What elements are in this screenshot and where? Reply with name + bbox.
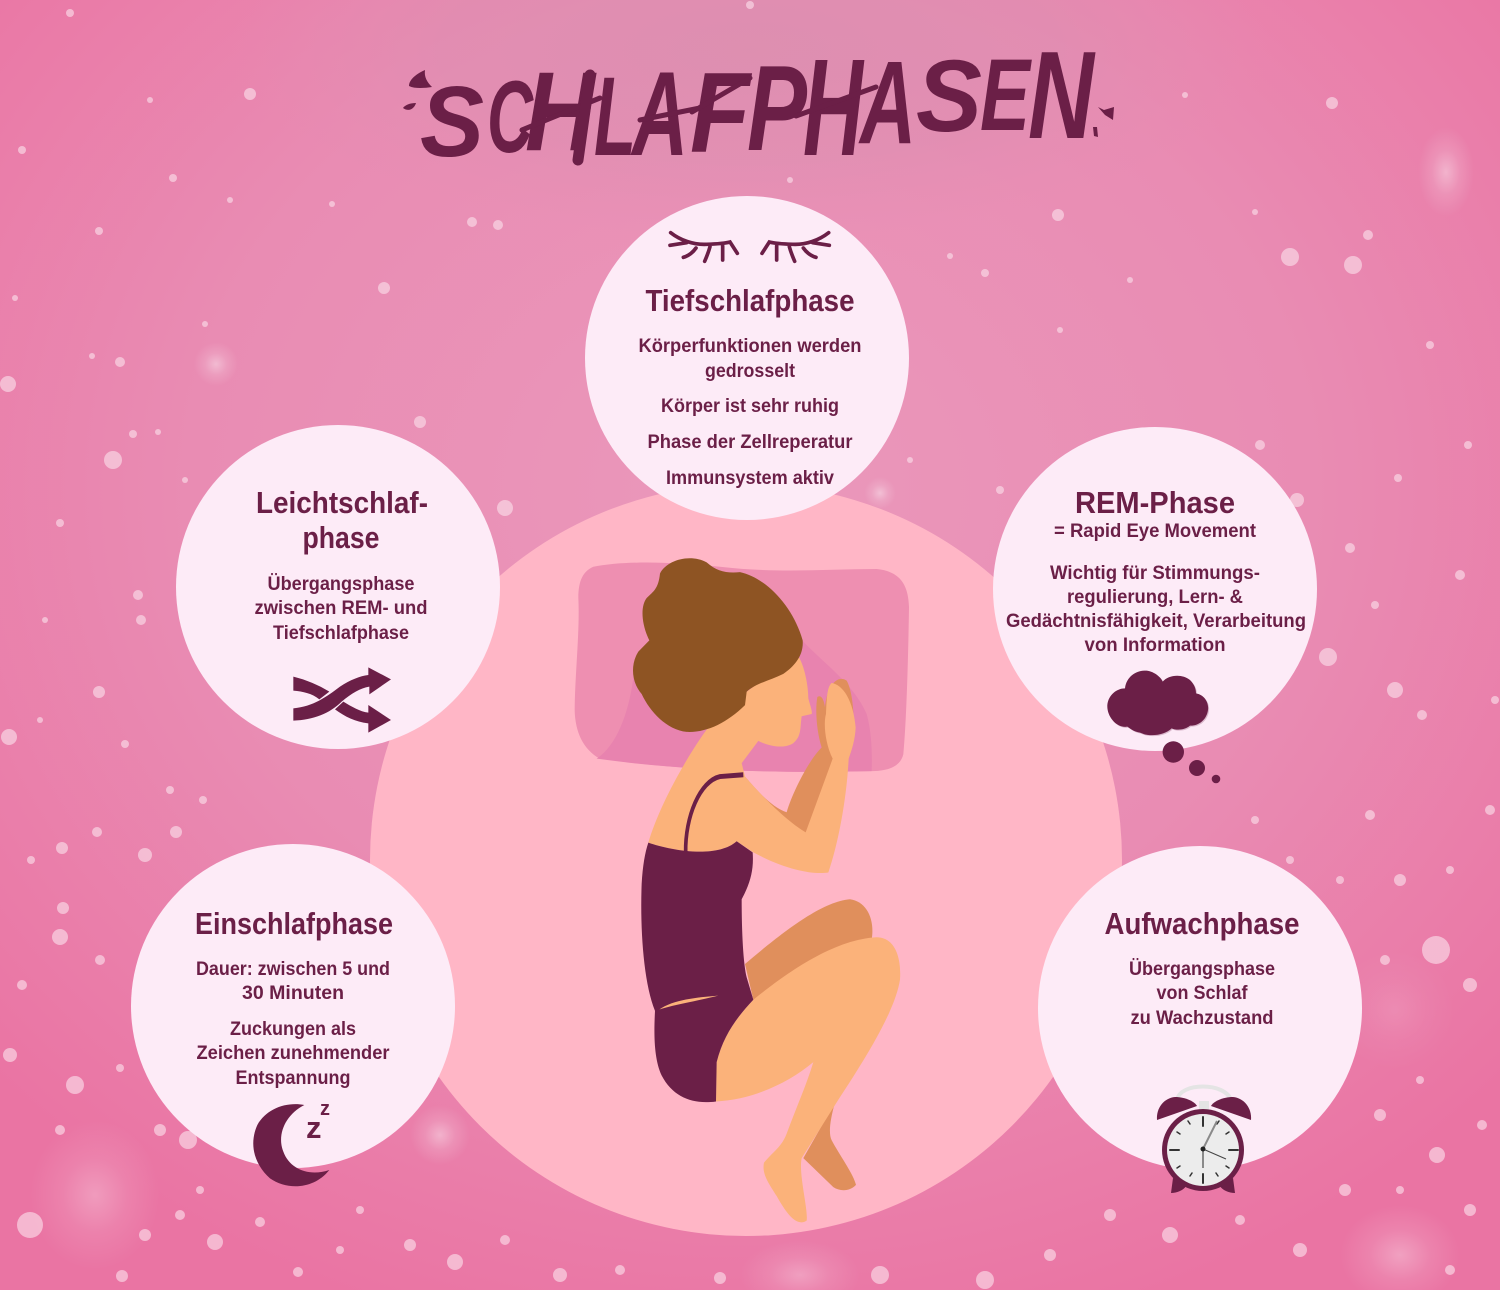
body text: Tiefschlafphase (273, 622, 409, 644)
heading (256, 485, 428, 555)
body text: von Schlaf (1156, 982, 1248, 1004)
strap (686, 775, 743, 852)
icon: alarm clock (1157, 1086, 1251, 1193)
heading: Tiefschlafphase (646, 283, 854, 318)
body text (638, 335, 862, 489)
heading: phase (302, 520, 380, 555)
icon: shuffle arrows (293, 667, 391, 733)
body text: Körperfunktionen werden (638, 335, 862, 357)
body text: Phase der Zellreperatur (648, 431, 853, 453)
body text: Zeichen zunehmender (196, 1042, 390, 1064)
title: C (487, 60, 534, 174)
woman sleeping on her side (633, 558, 900, 1222)
body text (196, 958, 390, 1089)
back leg and foot (745, 679, 872, 1190)
icon: moon with z (253, 1098, 330, 1186)
heading: Leichtschlaf- (256, 485, 428, 520)
camisole and shorts (641, 841, 753, 1102)
body text: Wichtig für Stimmungs- (1050, 562, 1260, 584)
body text: Dauer: zwischen 5 und (196, 958, 390, 980)
title: F (690, 50, 753, 177)
icon: moon with z: z (306, 1110, 322, 1145)
body text: Immunsystem aktiv (666, 467, 834, 489)
panel: Aufwachphase (1038, 846, 1362, 1193)
body text: zu Wachzustand (1130, 1007, 1274, 1029)
title: H (525, 49, 597, 174)
title (420, 27, 1096, 185)
title: L (594, 54, 636, 179)
large centre circle (370, 484, 1122, 1236)
title: A (630, 47, 688, 181)
skin (648, 654, 900, 1222)
body text: zwischen REM- und (254, 597, 428, 619)
body text: Entspannung (236, 1067, 350, 1089)
body text: Übergangsphase (268, 572, 415, 595)
icon: thought cloud (1107, 671, 1220, 783)
pillow (575, 563, 909, 772)
icon: closed eyes (670, 233, 829, 261)
body text: regulierung, Lern- & (1067, 586, 1243, 608)
title: P (747, 40, 807, 176)
body text: Körper ist sehr ruhig (661, 395, 839, 417)
title: S (916, 39, 982, 153)
heading: REM-Phase (1075, 485, 1235, 520)
title: A (858, 37, 916, 169)
title accents (403, 70, 1114, 160)
heading: Einschlafphase (195, 906, 393, 941)
title: S (420, 66, 484, 178)
body text: 30 Minuten (242, 982, 344, 1004)
panel: Leichtschlafphase (176, 425, 500, 749)
panel: REM-Phase (993, 427, 1317, 783)
body text: von Information (1084, 634, 1226, 656)
panel: Tiefschlafphase (585, 196, 909, 520)
subtitle: = Rapid Eye Movement (1054, 520, 1256, 542)
body text: Übergangsphase (1129, 957, 1275, 980)
body text: Zuckungen als (230, 1018, 356, 1040)
body text (254, 572, 428, 644)
body text (1129, 957, 1275, 1029)
hair (633, 558, 803, 732)
title: N (1028, 27, 1096, 165)
title: E (980, 38, 1032, 152)
title: H (803, 31, 865, 185)
icon: moon with z: z (320, 1098, 330, 1120)
heading: Aufwachphase (1104, 906, 1300, 941)
panel: Einschlafphase (131, 844, 455, 1186)
body text: gedrosselt (705, 360, 795, 382)
skin sliver at waist (659, 996, 718, 1010)
body text: Gedächtnisfähigkeit, Verarbeitung (1006, 610, 1306, 632)
body text (1006, 562, 1306, 656)
